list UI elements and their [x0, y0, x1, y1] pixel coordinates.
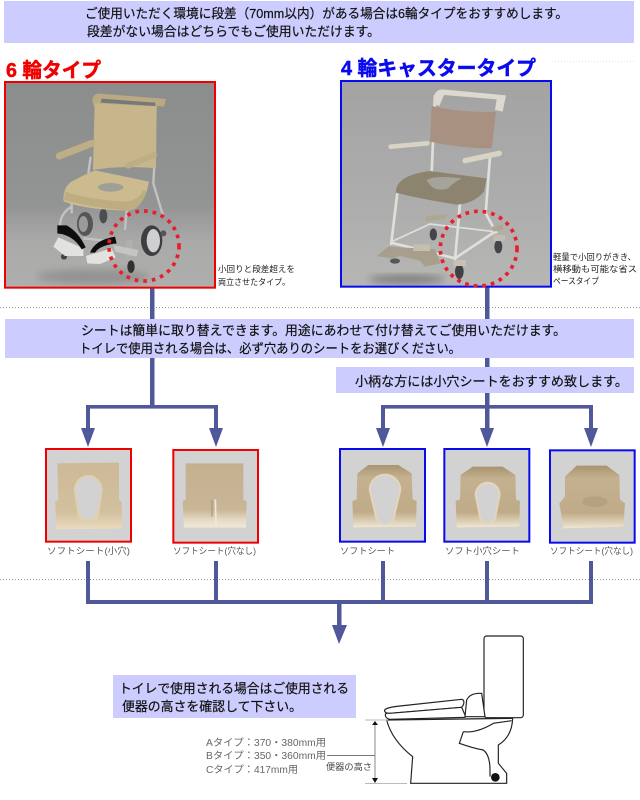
dotted divider lines: [0, 62, 640, 580]
seat: [396, 171, 487, 205]
seat: soft seat small hole: [46, 449, 131, 542]
seat: soft seat: [340, 449, 425, 542]
callout: caster highlight: [440, 211, 517, 286]
caption: 4-wheel type: ペースタイプ: [553, 276, 599, 286]
top notice banner: 段差がない場合はどちらでもご使用いただけます。: [87, 24, 380, 39]
foot plate: [377, 247, 441, 267]
seat replacement notice banner: シートは簡単に取り替えできます。用途にあわせて付け替えてご使用いただけます。: [81, 323, 566, 338]
heading: 6-wheel type: 6 輪タイプ: [6, 59, 101, 82]
top notice banner: [4, 1, 634, 43]
arrow: to toilet: [332, 625, 347, 644]
bowl: [387, 718, 513, 783]
caption: 4-wheel type: 横移動も可能な省ス: [553, 264, 637, 274]
arrow: to no-hole seat: [209, 428, 223, 447]
handle: [433, 89, 506, 112]
toilet height notice banner: [113, 675, 356, 718]
caption: 6-wheel type: [218, 264, 295, 287]
seat replacement notice banner: トイレで使用される場合は、必ず穴ありのシートをお選びください。: [79, 341, 461, 356]
toilet height list: Cタイプ：417mm用: [206, 764, 298, 776]
seat label: soft small-hole seat: ソフト小穴シート: [445, 546, 520, 556]
small-hole recommendation banner: 小柄な方には小穴シートをおすすめ致します。: [355, 374, 628, 389]
backrest: [430, 106, 496, 148]
rear wheels and frame: [60, 152, 163, 242]
toilet height notice banner: 便器の高さを確認して下さい。: [122, 699, 302, 714]
small-hole recommendation banner: [336, 367, 634, 393]
toilet height list: [206, 737, 326, 776]
caption: 4-wheel type: [553, 252, 637, 286]
panel: 4-wheel caster chair photo: [341, 81, 551, 287]
arrow: to soft seat: [376, 428, 390, 447]
seat: soft small-hole seat: [444, 449, 529, 542]
arrow: to soft no-hole seat: [584, 428, 598, 447]
seat: [63, 170, 149, 211]
caption: 4-wheel type: 軽量で小回りがきき、: [553, 252, 636, 262]
toilet height list: Bタイプ：350・360mm用: [206, 750, 326, 762]
seat label: soft seat: ソフトシート: [340, 546, 395, 556]
casters: [425, 214, 447, 222]
arrow: to small-hole seat: [81, 428, 95, 447]
toilet diagram: [385, 636, 523, 783]
tank: [484, 636, 523, 718]
seat lid: [385, 699, 464, 713]
armrests: [59, 143, 92, 156]
foot rests: [53, 237, 83, 256]
seat label: soft seat no hole (4-wheel): ソフトシート(穴なし): [550, 546, 633, 556]
hinge: [465, 693, 485, 717]
arrow: to soft small-hole seat: [480, 428, 494, 447]
front wheel and caster: [141, 225, 162, 256]
toilet height notice banner: トイレで使用される場合はご使用される: [119, 681, 349, 696]
label: toilet height: 便器の高さ: [326, 761, 372, 772]
armrests: [391, 143, 427, 147]
backrest: [93, 103, 157, 170]
seat replacement notice banner: [5, 319, 634, 358]
toilet height list: Aタイプ：370・380mm用: [206, 737, 326, 749]
panel: 6-wheel chair photo: [5, 82, 215, 288]
callout: wheel highlight: [109, 211, 179, 281]
handle: [92, 94, 166, 112]
seat: soft seat no hole (4-wheel): [550, 450, 635, 543]
caption: 6-wheel type: 両立させたタイプ。: [218, 277, 290, 287]
seat: soft seat no hole: [173, 450, 258, 543]
frame: [391, 95, 497, 260]
height dimension arrow: [327, 720, 407, 784]
seat label: soft seat small hole: ソフトシート(小穴): [47, 546, 130, 556]
trapway: [459, 721, 512, 777]
top notice banner: ご使用いただく環境に段差（70mm以内）がある場合は6輪タイプをおすすめします。: [85, 6, 568, 21]
connector lines: chairs to seats and seats to toilet: [86, 287, 593, 626]
seat label: soft seat no hole: ソフトシート(穴なし): [173, 546, 256, 556]
heading: 4-wheel caster type: 4 輪キャスタータイプ: [341, 57, 536, 80]
caption: 6-wheel type: 小回りと段差超えを: [218, 264, 295, 274]
